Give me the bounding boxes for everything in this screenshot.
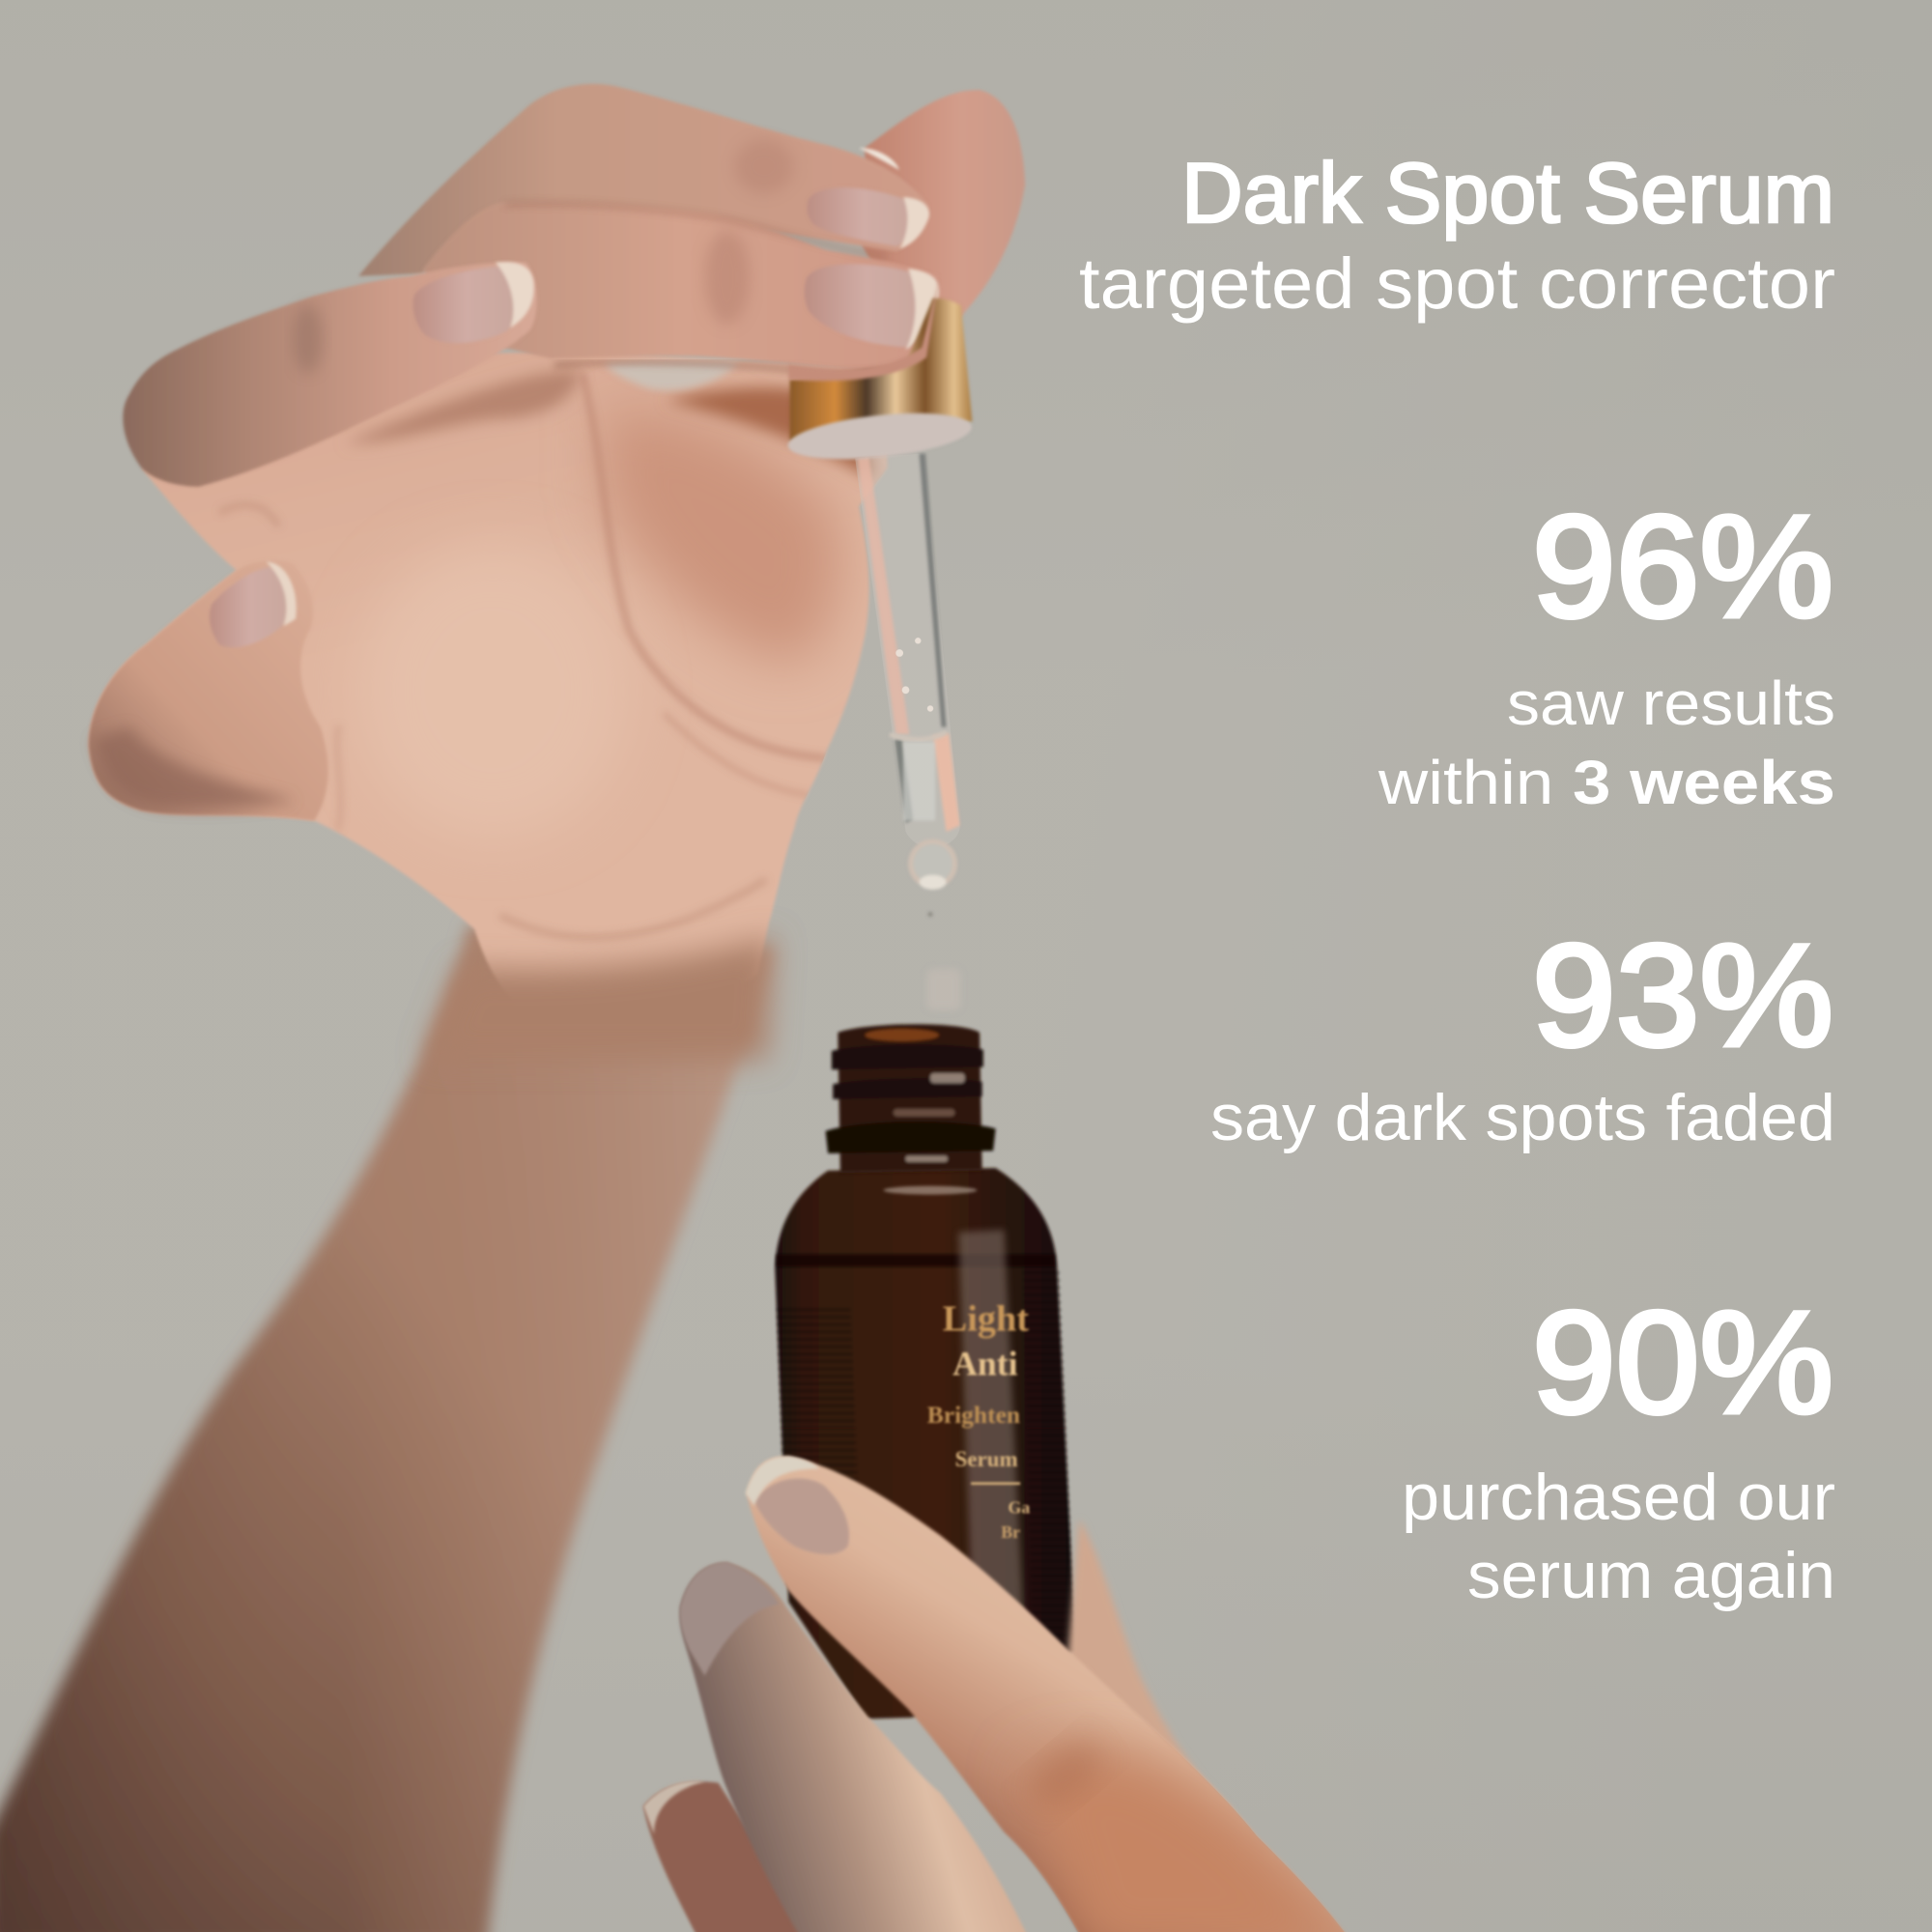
index nail (808, 148, 929, 249)
subtitle: targeted spot corrector (1079, 243, 1835, 324)
amber bottle (775, 1024, 1076, 1719)
text: product heading (1079, 145, 1835, 324)
hand silhouette (89, 352, 887, 1026)
thumb (863, 90, 1025, 357)
fingertip over cap (788, 278, 939, 381)
bottle label text: Anti (952, 1344, 1018, 1382)
lower hand (643, 1457, 1368, 1932)
index finger (358, 84, 929, 276)
forearm (0, 924, 774, 1932)
title: Dark Spot Serum (1181, 145, 1834, 241)
second finger (680, 1562, 1033, 1932)
pinky nail (210, 562, 297, 647)
front finger (746, 1457, 1368, 1932)
caption 90%: purchased our (1402, 1461, 1835, 1534)
bottle label text: Brighten (927, 1401, 1020, 1429)
photo artwork (0, 84, 1368, 1932)
caption 93%: say dark spots faded (1210, 1081, 1835, 1154)
second nail (680, 1562, 779, 1676)
front nail (746, 1457, 849, 1554)
caption 96%: saw results (1507, 668, 1835, 738)
bottle label text (927, 1299, 1030, 1542)
palm creases (222, 376, 823, 937)
value 96%: 96% (1532, 485, 1833, 647)
drop (911, 841, 955, 917)
bottle label text: Light (943, 1299, 1029, 1340)
middle finger (422, 201, 939, 375)
thenar shadow (604, 407, 841, 666)
pinky finger (89, 560, 328, 820)
ring finger (123, 262, 537, 487)
under-finger shadow (345, 370, 579, 443)
wrist blend into forearm (425, 936, 774, 1060)
shoulder shine (777, 1186, 1055, 1266)
glass pipette (855, 453, 960, 847)
bottle label text: Ga (1009, 1497, 1030, 1517)
ring nail (413, 262, 534, 343)
web shadow behind thumb (666, 387, 875, 480)
gold cap (785, 298, 974, 467)
bottle label text: Br (1001, 1522, 1020, 1542)
vertical reflection (958, 1230, 1025, 1658)
bottle label text: Serum (955, 1447, 1018, 1471)
stat: 96% (1378, 485, 1835, 817)
dropper (785, 278, 974, 1010)
falling liquid (926, 969, 961, 1010)
upper hand (89, 84, 1025, 1060)
caption line 2: within 3 weeks (1378, 748, 1835, 817)
caption line 2: serum again (1467, 1539, 1835, 1612)
value 93%: 93% (1532, 914, 1833, 1076)
bottle ribbing texture (777, 1269, 1076, 1651)
stat: 93% (1210, 914, 1835, 1154)
bottle body (775, 1168, 1076, 1719)
back finger behind bottle (1067, 1520, 1233, 1848)
palm highlight (381, 553, 605, 814)
value 90%: 90% (1532, 1281, 1833, 1443)
warm knuckle tone (1023, 1752, 1368, 1932)
middle nail (805, 264, 939, 350)
stat: 90% (1402, 1281, 1835, 1612)
light gap between finger and palm (604, 360, 739, 390)
bottle neck (826, 1024, 996, 1173)
third finger (643, 1781, 826, 1932)
palm shading (222, 370, 875, 937)
